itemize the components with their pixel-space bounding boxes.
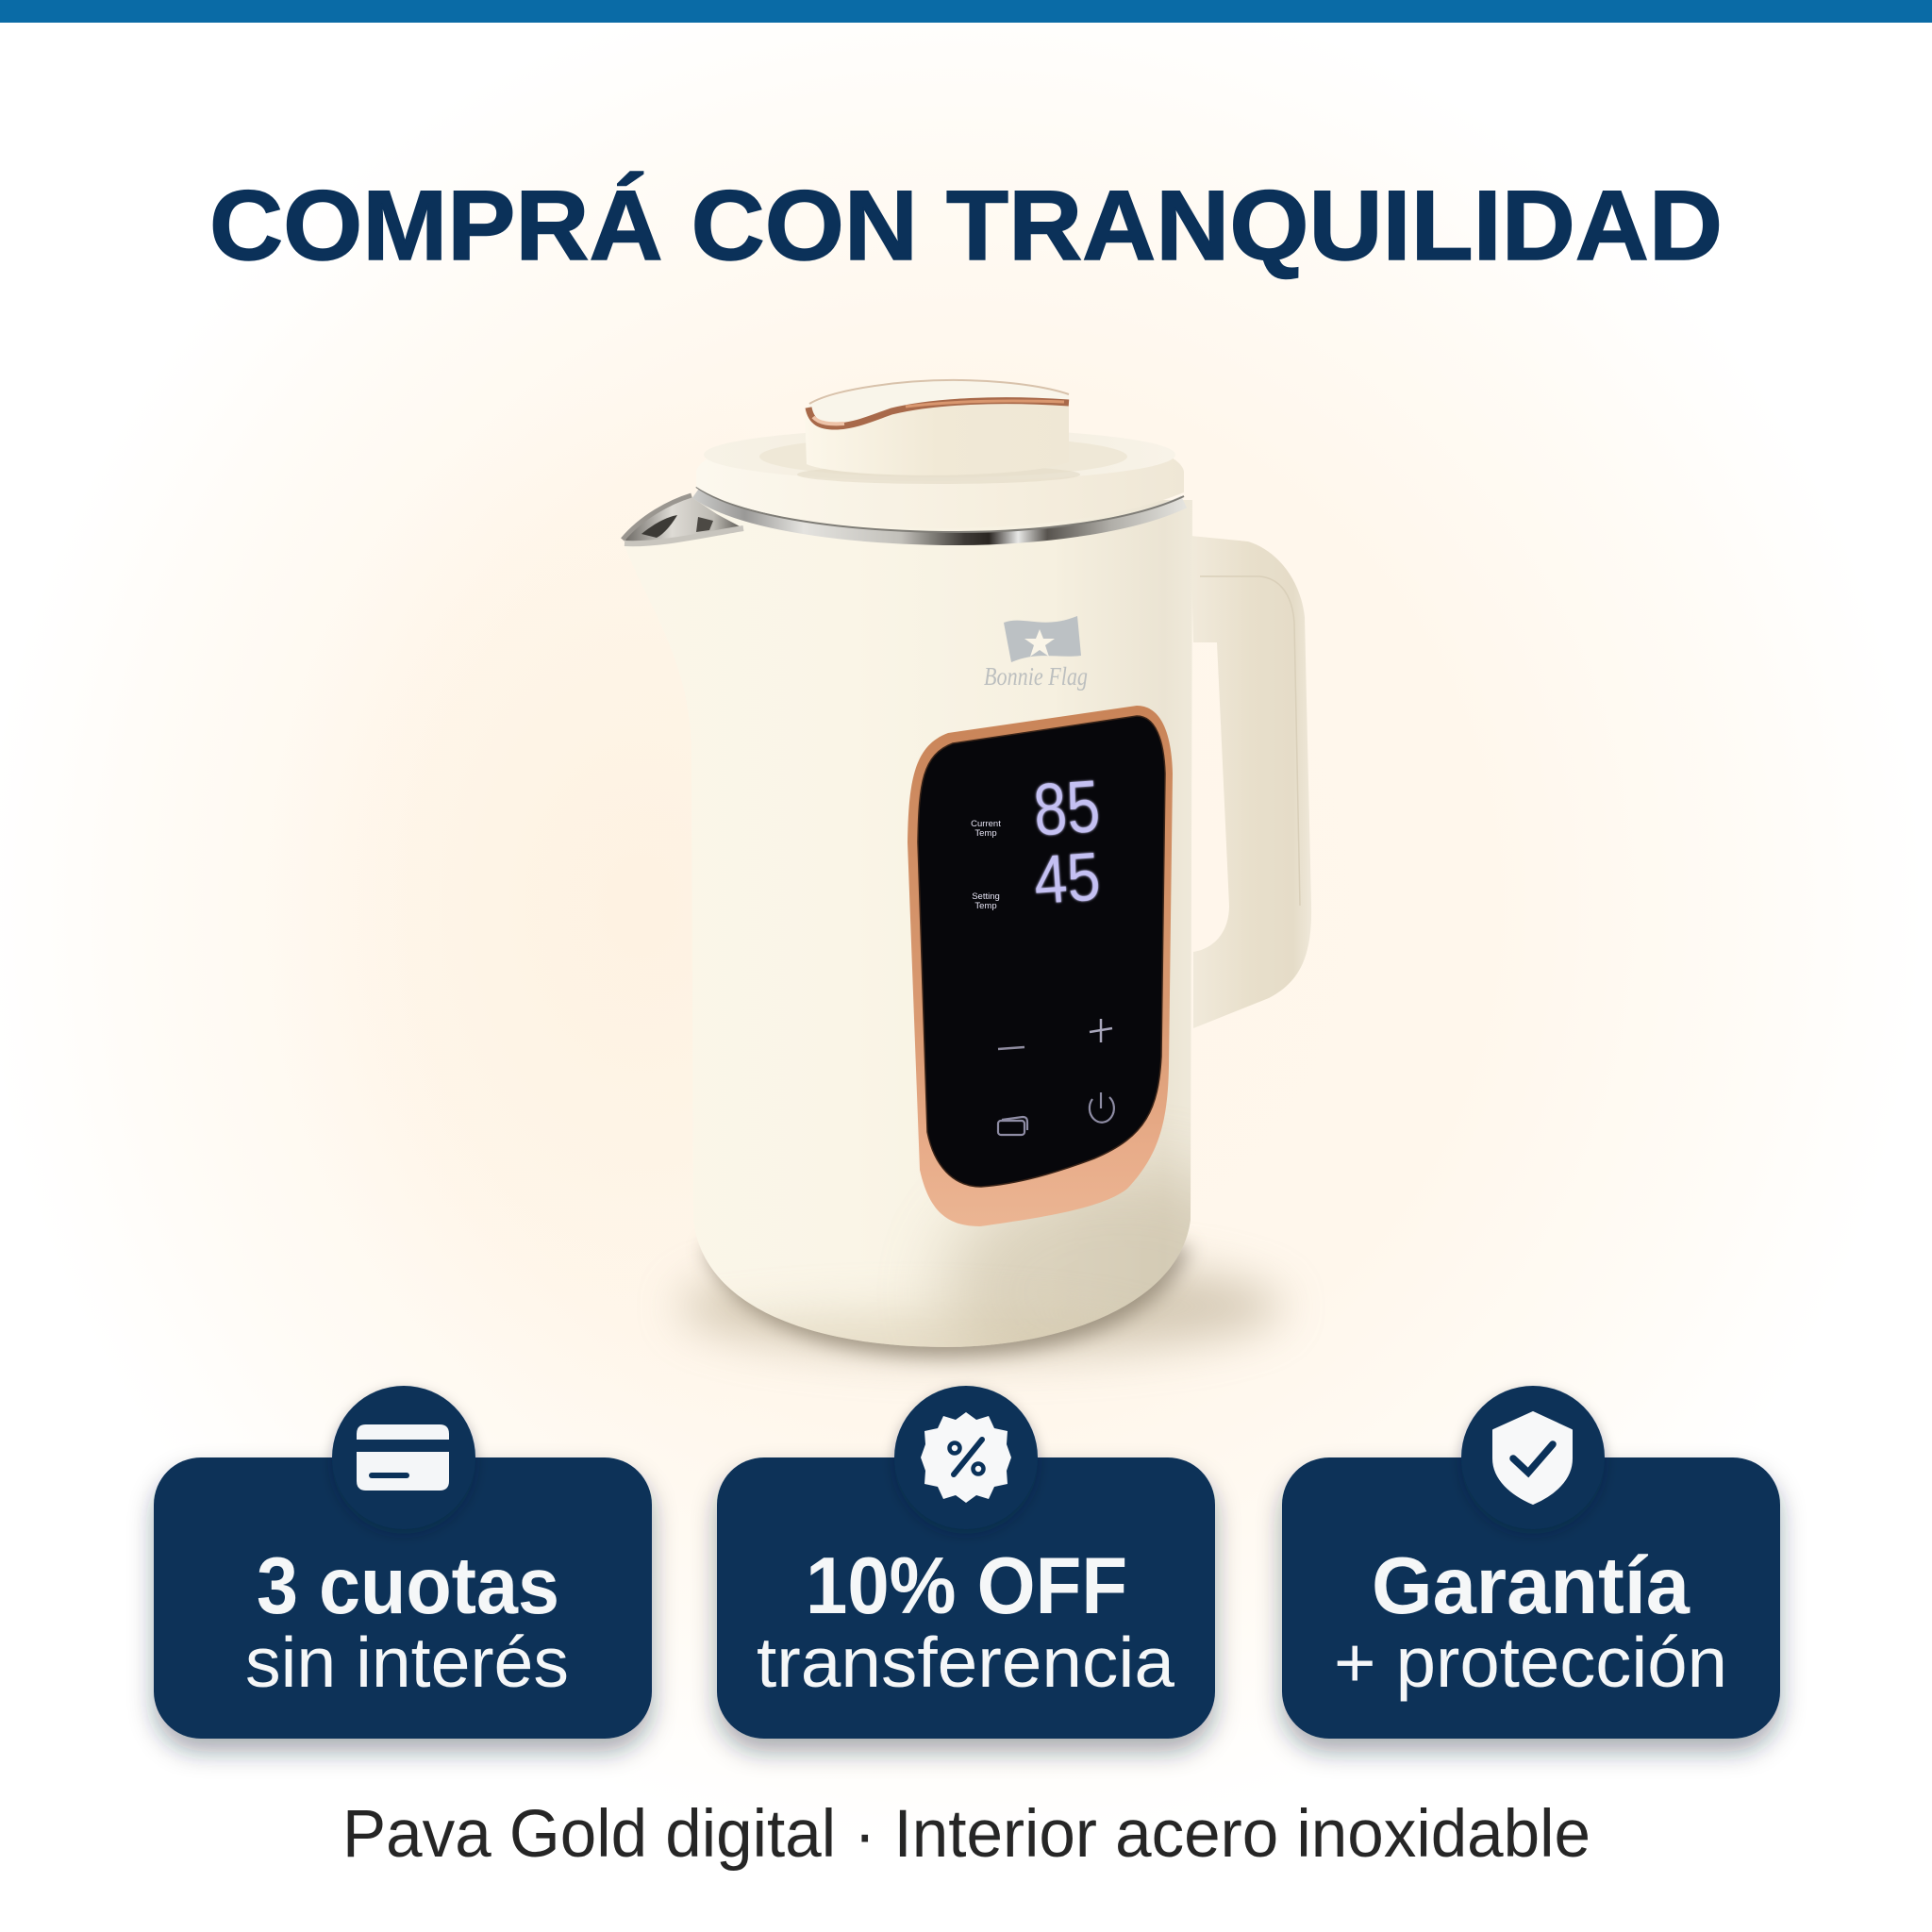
power button — [1090, 1092, 1114, 1123]
card text: Garantía — [1372, 1541, 1690, 1631]
setting temp value: 45 — [1031, 840, 1103, 919]
icon: credit card — [357, 1424, 449, 1491]
card: 10% off: transferencia — [757, 1623, 1174, 1702]
plus button — [1090, 1019, 1112, 1042]
control panel — [908, 706, 1173, 1226]
minus button — [998, 1047, 1024, 1049]
card: garantia — [1282, 1386, 1780, 1739]
logo flag — [1004, 616, 1081, 662]
setting temp label: Setting — [972, 891, 1000, 902]
kettle brand logo — [984, 616, 1088, 691]
product: kettle — [623, 380, 1311, 1415]
card text: 10% OFF — [806, 1541, 1127, 1631]
kettle spout metal — [623, 495, 743, 543]
footer caption: Pava Gold digital · Interior acero inoxidable — [342, 1797, 1591, 1872]
current temp value: 85 — [1031, 764, 1103, 851]
kettle body — [698, 500, 1192, 1347]
card: 3 cuotas — [154, 1386, 652, 1739]
card: 10% off — [717, 1386, 1215, 1739]
card text: 3 cuotas — [257, 1541, 559, 1631]
card: garantia: + protección — [1334, 1623, 1727, 1702]
current temp label: Current — [971, 819, 1001, 829]
icon: discount badge — [921, 1412, 1011, 1503]
card: 3 cuotas: sin interés — [245, 1623, 569, 1702]
title: COMPRÁ CON TRANQUILIDAD — [209, 170, 1723, 281]
kettle chrome ring — [696, 487, 1184, 539]
control panel: Temp — [974, 901, 997, 911]
kettle handle — [1191, 536, 1311, 1028]
floor shadow — [679, 1245, 1283, 1357]
kettle lid — [696, 426, 1184, 528]
mode button — [998, 1117, 1027, 1135]
kettle lid knob — [797, 380, 1080, 484]
control panel: Temp — [974, 828, 997, 839]
panel screen — [918, 716, 1165, 1187]
top bar — [0, 0, 1932, 23]
logo star — [1024, 629, 1055, 657]
icon: shield — [1493, 1412, 1572, 1504]
logo name: Bonnie Flag — [984, 662, 1088, 691]
panel copper frame — [908, 706, 1173, 1226]
